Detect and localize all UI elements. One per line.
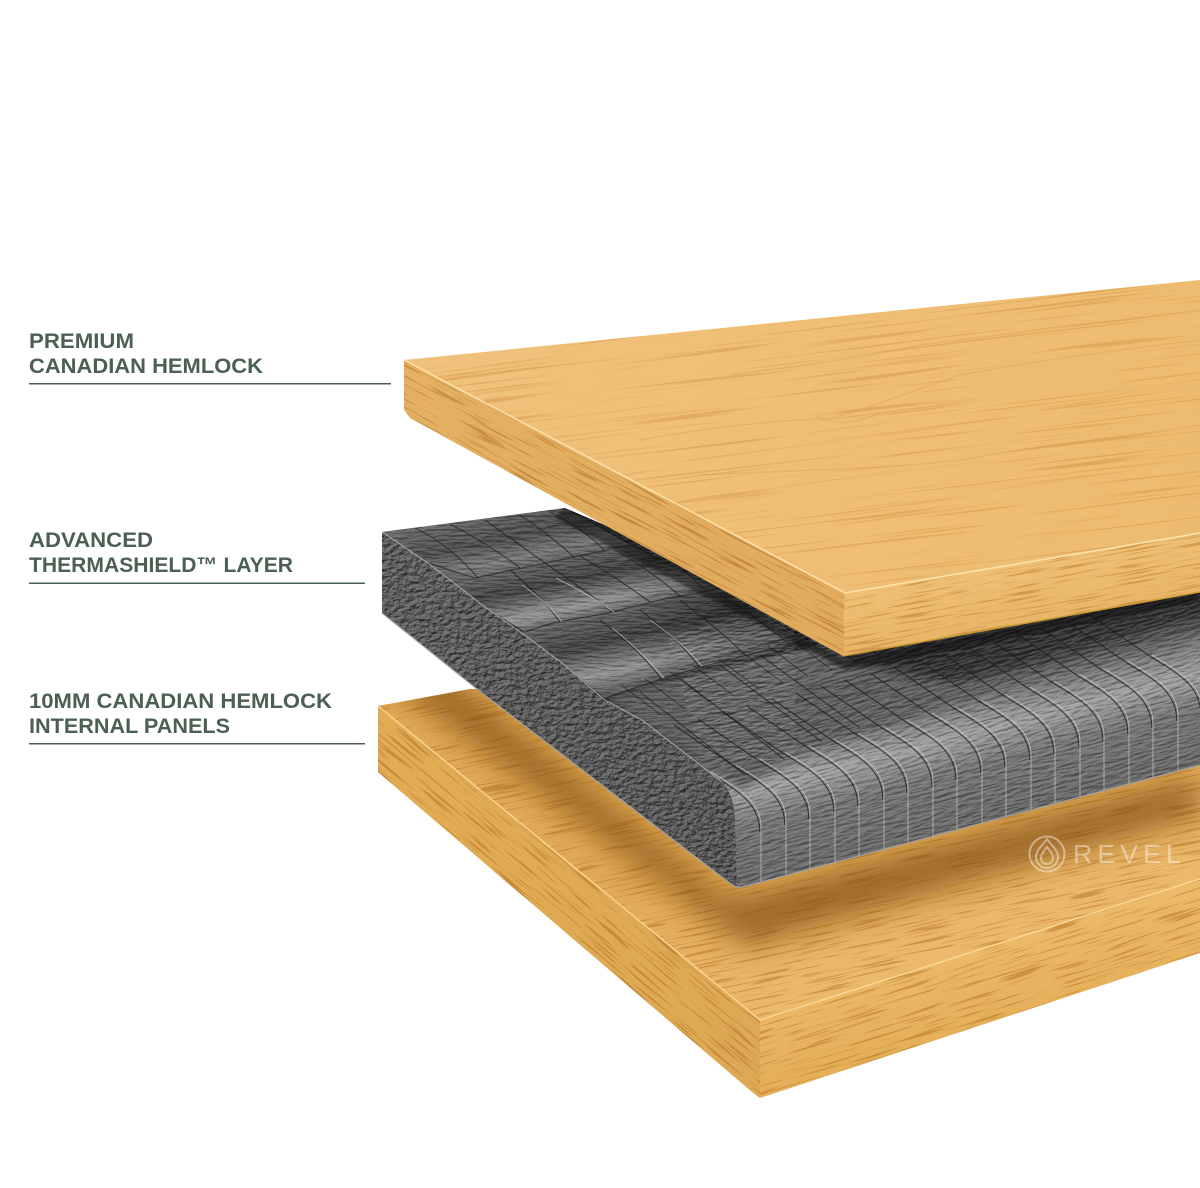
insulation long seams: [428, 545, 1200, 745]
insulation dark shadow below top panel: [555, 505, 1200, 670]
insulation bottom edge: [382, 613, 1200, 887]
top panel left face: [404, 360, 845, 656]
label text: CANADIAN HEMLOCK: [29, 355, 263, 378]
insulation ridge highlights: [522, 578, 702, 678]
top panel edge highlight: [404, 360, 1200, 593]
label text: 10MM CANADIAN HEMLOCK: [29, 690, 332, 713]
insulation wrap lines: [596, 616, 1200, 882]
bottom panel right face: [760, 879, 1200, 1098]
insulation left face: [375, 525, 745, 895]
logo icon: water drop in ring: [1030, 836, 1064, 872]
top panel underside edge: [843, 592, 1200, 656]
top panel right face: [843, 533, 1200, 656]
bottom panel top face: [378, 689, 1200, 1020]
ridge band 1: [382, 508, 632, 578]
mid band behind the roll: [605, 642, 1010, 790]
ridge band 3: [522, 590, 815, 698]
insulation left edge highlight: [382, 532, 722, 782]
thermashield insulation layer: [382, 508, 1200, 888]
leader line: [29, 383, 391, 384]
bottom panel edge highlight: [378, 706, 1200, 1020]
label text: INTERNAL PANELS: [29, 715, 230, 738]
label text: ADVANCED: [29, 529, 153, 552]
bottom hemlock panel: [378, 689, 1200, 1098]
label: advanced thermashield layer: [29, 529, 365, 584]
insulation top and front faces: [382, 508, 1200, 886]
label: premium canadian hemlock: [29, 330, 391, 384]
label text: PREMIUM: [29, 330, 134, 353]
top hemlock panel: [404, 280, 1200, 657]
ridge band 2: [428, 546, 717, 632]
REVEL watermark logo: [1030, 836, 1186, 872]
label: 10mm canadian hemlock internal panels: [29, 690, 365, 744]
leader line: [29, 582, 365, 584]
cathedral grain: [640, 310, 1200, 475]
label text: THERMASHIELD™ LAYER: [29, 554, 293, 577]
leader line: [29, 743, 365, 744]
top panel top face: [405, 280, 1200, 593]
bottom panel left face: [378, 706, 760, 1098]
insulation ridge wrap lines: [415, 512, 860, 775]
logo wordmark: REVEL: [1073, 839, 1186, 869]
